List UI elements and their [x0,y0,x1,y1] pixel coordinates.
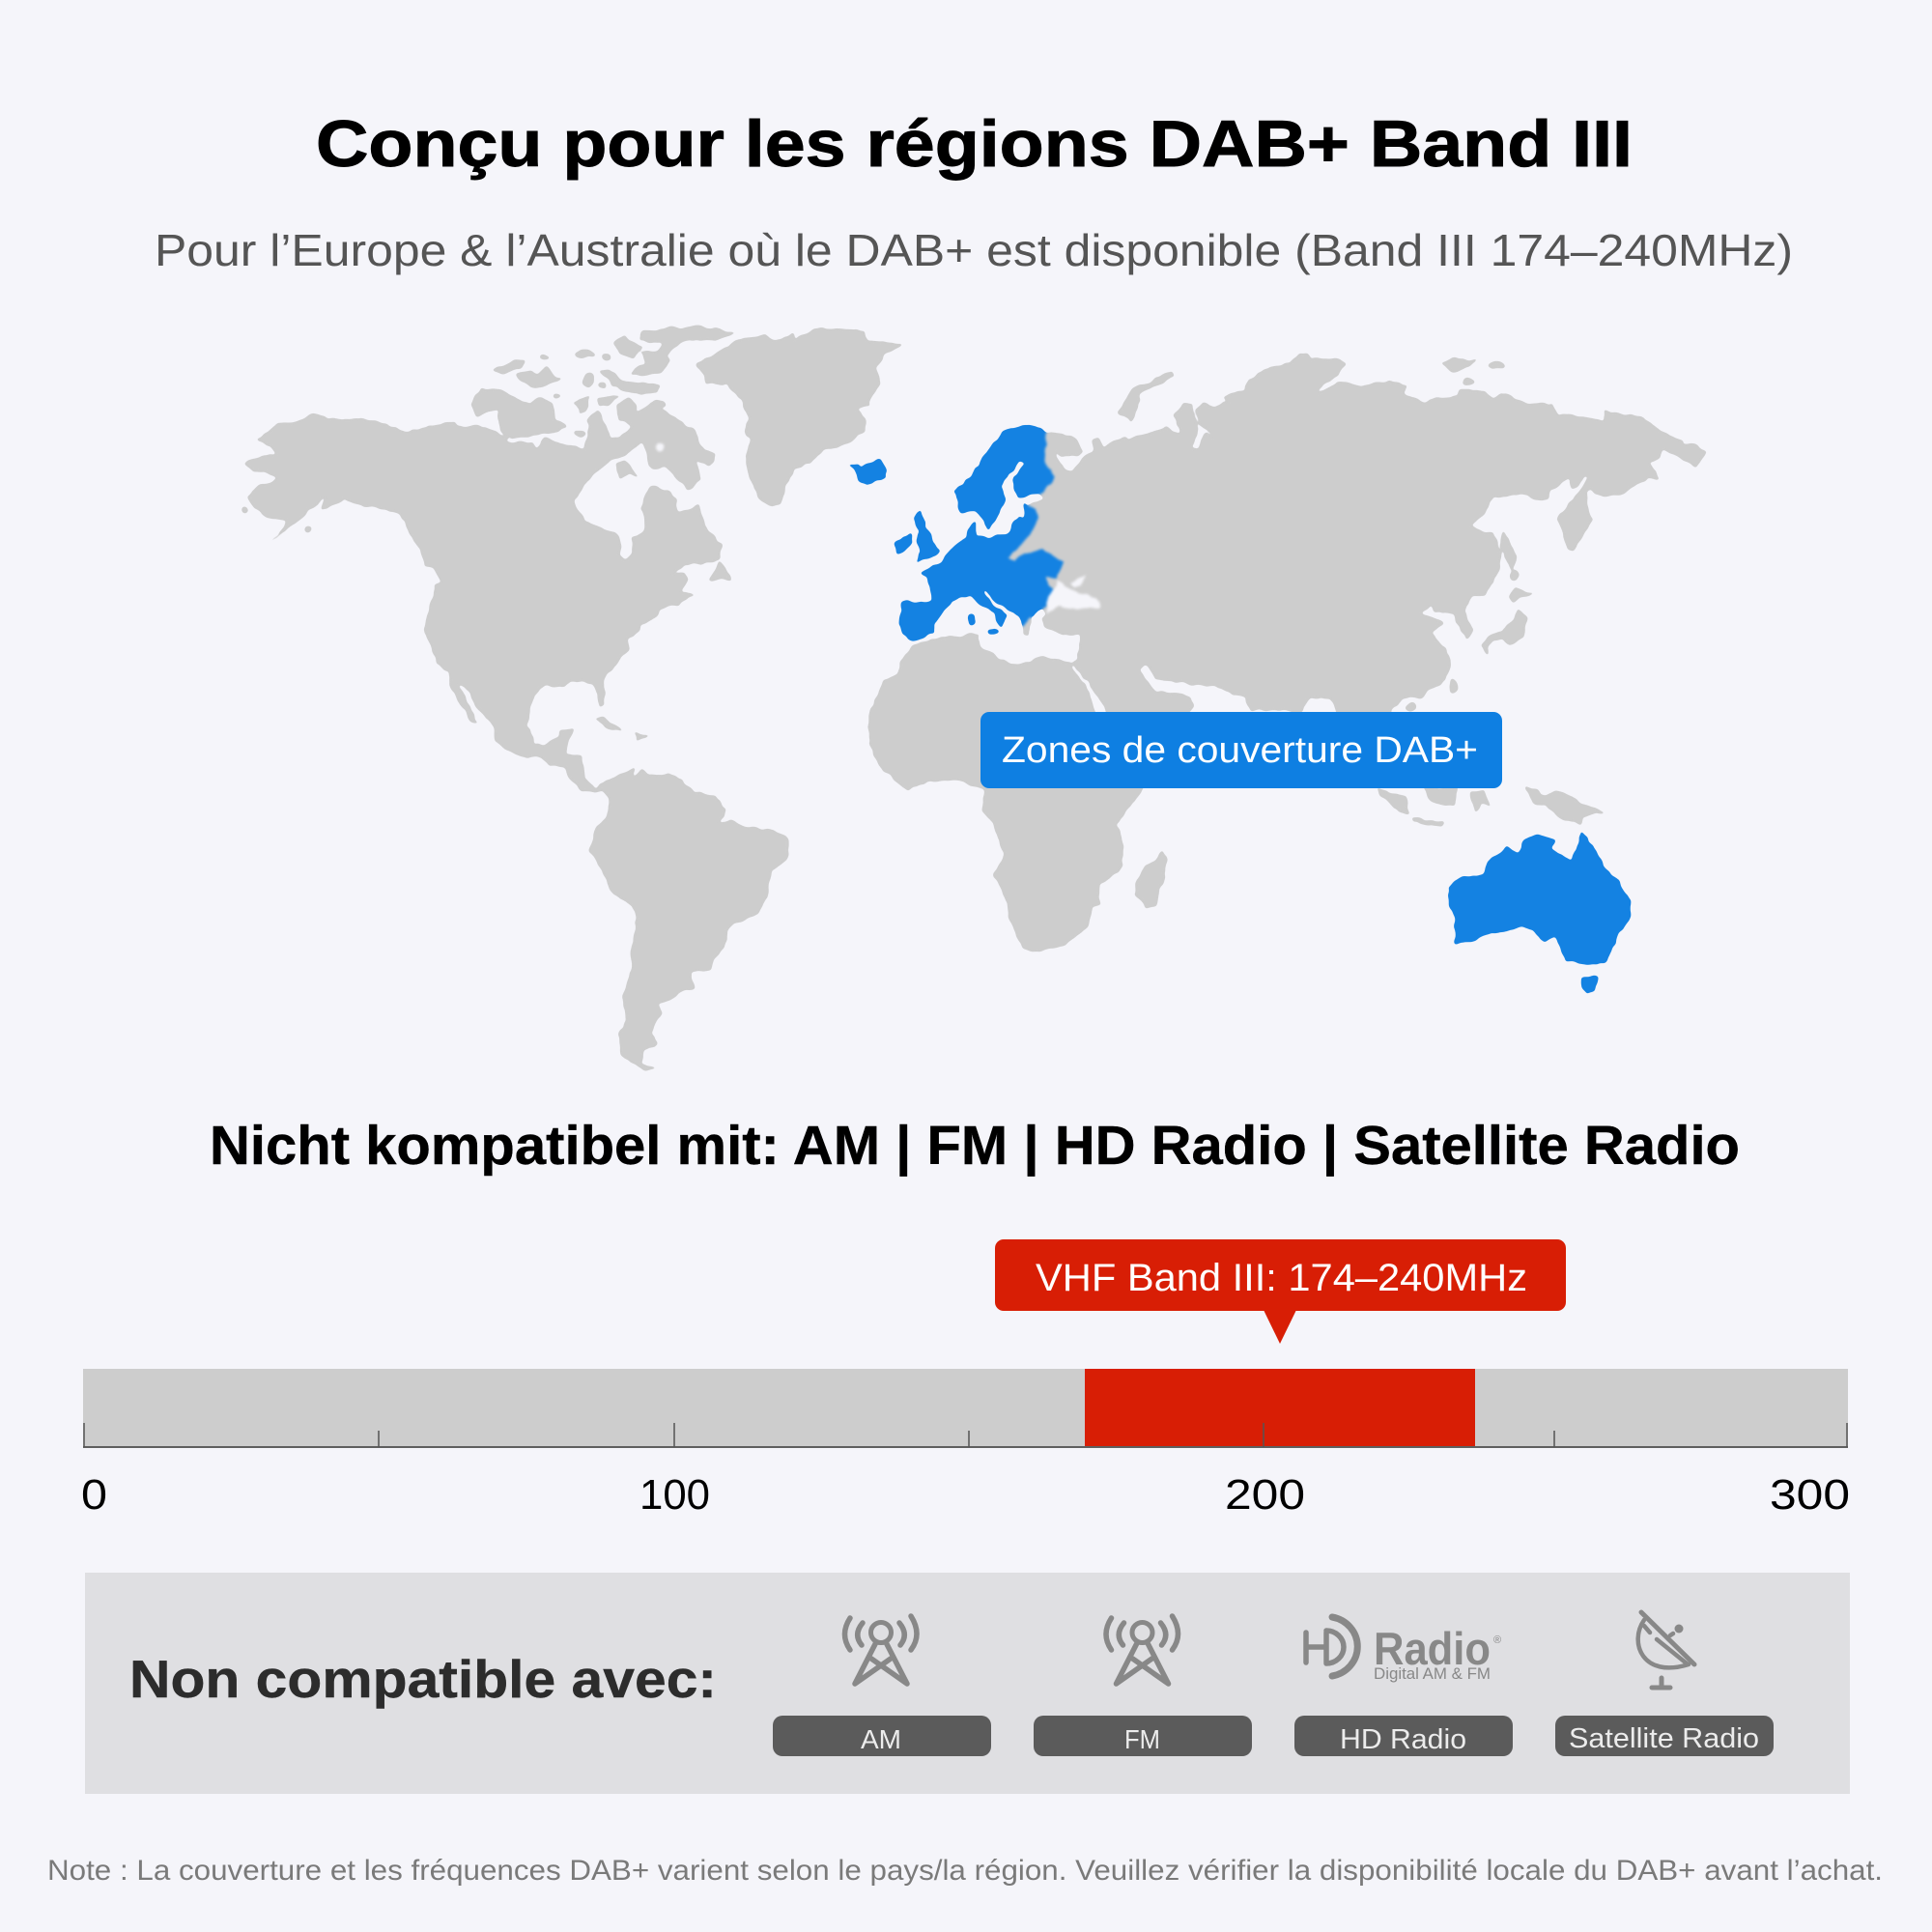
label: FM: FM [1124,1724,1160,1754]
highlighted band [1085,1369,1475,1447]
map: Europe coverage [849,425,1063,639]
axis labels: 300 [1770,1471,1850,1519]
icon: FM tower [1106,1616,1179,1684]
callout: coverage zones [980,712,1502,788]
map: Americas and Greenland [241,327,902,1070]
label: AM: AM [861,1724,901,1754]
panel heading: Non compatible avec: [129,1649,717,1709]
icon: AM tower [844,1616,917,1684]
frequency bar chart [81,1369,1850,1519]
label: HD Radio [1294,1716,1513,1756]
axis labels: 100 [639,1471,710,1519]
label: HD Radio: HD Radio [1340,1724,1466,1755]
label: FM [1034,1716,1252,1756]
world map [241,327,1706,1070]
footnote: Note : La couverture et les fréquences DAB+ varient selon le pays/la région. Veuillez vérifier la disponibilité locale du DAB+ avant l’achat. [47,1855,1883,1887]
map: Eurasia, Africa and Asia-Pacific islands [869,355,1706,952]
callout: VHF band: VHF Band III: 174–240MHz [1036,1257,1527,1299]
map: landmasses [241,327,1706,1070]
icon: HD Radio logo: Radio [1374,1623,1491,1674]
label: AM [773,1716,991,1756]
title: Conçu pour les régions DAB+ Band III [316,107,1633,181]
icon: HD Radio logo: Digital AM & FM [1374,1664,1491,1683]
heading: not compatible: Nicht kompatibel mit: AM | FM | HD Radio | Satellite Radio [210,1115,1740,1177]
callout: coverage zones: Zones de couverture DAB+ [1002,730,1478,771]
panel: non compatible [85,1573,1850,1794]
callout: VHF band [995,1239,1566,1344]
axis labels: 0 [81,1471,107,1519]
label: Satellite Radio: Satellite Radio [1569,1723,1759,1754]
axis labels [81,1471,1850,1519]
subtitle: Pour l’Europe & l’Australie où le DAB+ est disponible (Band III 174–240MHz) [155,225,1793,275]
map: Australia coverage [1449,833,1631,993]
map: Black Sea cut-out [1046,575,1100,614]
icon: HD Radio logo: ® [1493,1634,1501,1646]
icon: HD Radio logo [1306,1617,1501,1683]
label: Satellite Radio [1555,1716,1774,1756]
icon: satellite dish [1638,1612,1694,1688]
axis labels: 200 [1225,1471,1305,1519]
